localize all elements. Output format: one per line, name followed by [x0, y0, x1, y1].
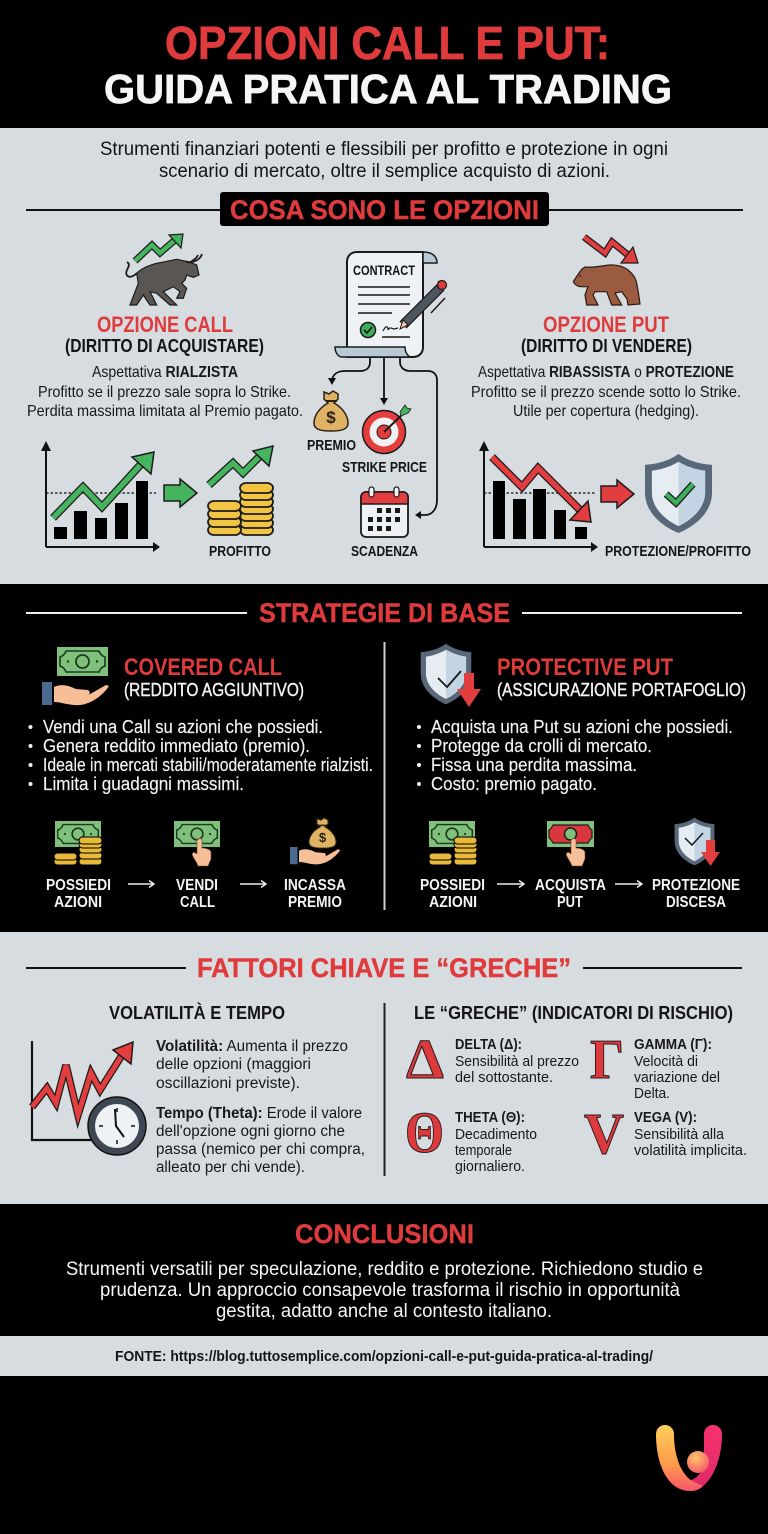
flow step: possiedi azioni: AZIONI [54, 894, 102, 911]
title: GUIDA PRATICA AL TRADING [104, 66, 672, 112]
flow step: possiedi azioni: AZIONI [429, 894, 477, 911]
title: OPZIONI CALL E PUT: [165, 17, 610, 69]
flow step: acquista put: PUT [557, 894, 583, 911]
covered call heading [124, 654, 304, 700]
title [104, 17, 672, 112]
conclusion text [66, 1259, 703, 1322]
call description: Aspettativa RIALZISTA [92, 364, 238, 381]
icon: bear with red arrow [573, 237, 640, 305]
icon: premio money bag: $ [326, 408, 336, 427]
protective put heading [497, 654, 746, 700]
protective put heading: PROTECTIVE PUT [497, 654, 673, 681]
flow step: incassa premio [284, 818, 346, 911]
text: tempo: Tempo (Theta): Erode il valore [156, 1105, 362, 1122]
flow step: acquista put: ACQUISTA [535, 877, 606, 894]
panel: footer [0, 1376, 768, 1534]
text: tempo: passa (nemico per chi compra, [156, 1141, 365, 1158]
text: delta [455, 1037, 579, 1086]
put heading: OPZIONE PUT [543, 312, 669, 337]
panel: fonte [0, 1336, 768, 1376]
put description: Aspettativa RIBASSISTA o PROTEZIONE [478, 364, 734, 381]
text: theta: temporale [455, 1143, 512, 1159]
text: tempo: alleato per chi vende). [156, 1159, 305, 1176]
call heading [65, 312, 264, 356]
arrow [240, 880, 266, 888]
protective put bullets: Protegge da crolli di mercato. [431, 736, 652, 756]
icon: logo [656, 1425, 722, 1491]
arrow: contract to scadenza [400, 358, 437, 519]
put description [471, 364, 741, 420]
icon: delta: Δ [406, 1029, 444, 1091]
text: gamma: GAMMA (Γ): [634, 1037, 712, 1053]
intro text: scenario di mercato, oltre il semplice acquisto di azioni. [159, 161, 610, 182]
put description: Profitto se il prezzo scende sotto lo Strike. [471, 384, 741, 401]
text: vega [634, 1110, 747, 1159]
conclusion text: prudenza. Un approccio consapevole trasforma il rischio in opportunità [100, 1280, 680, 1301]
text: delta: Sensibilità al prezzo [455, 1054, 579, 1070]
subheading: volatilita e tempo: VOLATILITÀ E TEMPO [109, 1002, 285, 1023]
heading: conclusioni: CONCLUSIONI [295, 1219, 474, 1249]
protective put bullets: Acquista una Put su azioni che possiedi. [431, 717, 733, 737]
text: volatilita [156, 1038, 348, 1092]
text: vega: volatilità implicita. [634, 1143, 747, 1159]
panel: cosa sono le opzioni [0, 128, 768, 584]
conclusion text: Strumenti versatili per speculazione, reddito e protezione. Richiedono studio e [66, 1259, 703, 1280]
label: profitto: PROFITTO [209, 543, 271, 560]
panel: strategie di base [0, 584, 768, 932]
icon: shield with red arrow [421, 644, 481, 707]
panel: header [0, 0, 768, 128]
text: delta: del sottostante. [455, 1070, 553, 1086]
flow step: protezione discesa: DISCESA [666, 894, 726, 911]
chart: call payoff [41, 441, 160, 552]
text: theta: THETA (Θ): [455, 1110, 525, 1126]
protective put bullets [417, 717, 733, 794]
covered call bullets: Vendi una Call su azioni che possiedi. [43, 717, 323, 737]
text: tempo: dell'opzione ogni giorno che [156, 1123, 345, 1140]
call description: Profitto se il prezzo sale sopra lo Strike. [38, 384, 291, 401]
text: volatilita: oscillazioni previste). [156, 1075, 300, 1092]
text: gamma: Velocità di [634, 1054, 698, 1070]
text: volatilita: delle opzioni (maggiori [156, 1056, 311, 1073]
flow step: protezione discesa: PROTEZIONE [652, 877, 740, 894]
panel: fattori chiave e greche [0, 932, 768, 1204]
arrow: contract to strike [380, 358, 388, 405]
put heading [521, 312, 692, 356]
covered call bullets: Ideale in mercati stabili/moderatamente rialzisti. [43, 755, 373, 775]
label: premio: PREMIO [307, 437, 356, 454]
text: gamma: variazione del [634, 1070, 720, 1086]
label: strike price: STRIKE PRICE [342, 459, 427, 476]
text: gamma: Delta. [634, 1086, 670, 1102]
heading: fattori chiave: FATTORI CHIAVE E “GRECHE” [197, 953, 571, 983]
protective put bullets: Fissa una perdita massima. [431, 755, 637, 775]
intro text [100, 139, 668, 182]
intro text: Strumenti finanziari potenti e flessibili per profitto e protezione in ogni [100, 139, 668, 160]
heading: cosa sono le opzioni: COSA SONO LE OPZIONI [230, 195, 539, 225]
flow step: incassa premio: INCASSA [284, 877, 346, 894]
icon: green check shield [645, 454, 712, 533]
covered call bullets: Genera reddito immediato (premio). [43, 736, 310, 756]
arrow [128, 880, 154, 888]
text: vega: VEGA (V): [634, 1110, 697, 1126]
icon: theta: Θ [405, 1100, 444, 1165]
call heading: OPZIONE CALL [97, 312, 233, 337]
icon: coins profit [208, 446, 273, 535]
icon: volatility chart with clock [32, 1041, 146, 1155]
text: gamma [634, 1037, 720, 1102]
icon: contract [335, 252, 446, 357]
heading: strategie di base: STRATEGIE DI BASE [259, 598, 510, 628]
flow step: incassa premio: $ [319, 830, 327, 845]
chart: put payoff [479, 441, 598, 552]
text: theta: giornaliero. [455, 1159, 525, 1175]
arrow [497, 880, 524, 888]
flow step: vendi call [174, 821, 220, 911]
flow step: vendi call: CALL [180, 894, 215, 911]
text: tempo [156, 1105, 365, 1176]
arrow [615, 880, 642, 888]
covered call heading: (REDDITO AGGIUNTIVO) [124, 680, 304, 700]
flow step: incassa premio: PREMIO [288, 894, 342, 911]
put description: Utile per copertura (hedging). [513, 403, 699, 420]
icon: contract: CONTRACT [353, 262, 415, 278]
icon: bill and hand [42, 647, 109, 705]
flow step: possiedi azioni [420, 821, 485, 911]
flow step: possiedi azioni: POSSIEDI [46, 877, 111, 894]
icon: vega: V [584, 1101, 624, 1166]
flow step: vendi call: VENDI [176, 877, 218, 894]
flow step: protezione discesa [652, 818, 740, 911]
icon: gamma: Γ [590, 1029, 624, 1091]
icon: premio money bag [314, 391, 348, 431]
arrow: contract to premio [328, 358, 370, 385]
flow step: acquista put [535, 821, 606, 911]
icon: target [362, 405, 411, 454]
arrow: red [601, 480, 634, 508]
icon: bull with green arrow [126, 234, 202, 305]
text: theta [455, 1110, 537, 1175]
text: volatilita: Volatilità: Aumenta il prezzo [156, 1038, 348, 1055]
subheading: le greche: LE “GRECHE” (INDICATORI DI RISCHIO) [414, 1003, 733, 1023]
source text: FONTE: https://blog.tuttosemplice.com/opzioni-call-e-put-guida-pratica-al-trading/ [115, 1348, 654, 1365]
put heading: (DIRITTO DI VENDERE) [521, 336, 692, 356]
covered call bullets [28, 717, 373, 794]
call description: Perdita massima limitata al Premio pagato. [27, 403, 303, 420]
covered call bullets: Limita i guadagni massimi. [43, 774, 244, 794]
panel: conclusioni [0, 1204, 768, 1336]
call heading: (DIRITTO DI ACQUISTARE) [65, 336, 264, 356]
conclusion text: gestita, adatto anche al contesto italiano. [216, 1301, 552, 1322]
flow step: possiedi azioni [46, 821, 111, 911]
label: scadenza: SCADENZA [351, 543, 418, 560]
text: vega: Sensibilità alla [634, 1127, 725, 1143]
call description [27, 364, 303, 420]
protective put bullets: Costo: premio pagato. [431, 774, 597, 794]
text: delta: DELTA (Δ): [455, 1037, 522, 1053]
text: theta: Decadimento [455, 1127, 537, 1143]
icon: calendar [361, 487, 408, 537]
covered call heading: COVERED CALL [124, 654, 282, 681]
arrow: green [164, 479, 197, 507]
flow step: possiedi azioni: POSSIEDI [420, 877, 485, 894]
